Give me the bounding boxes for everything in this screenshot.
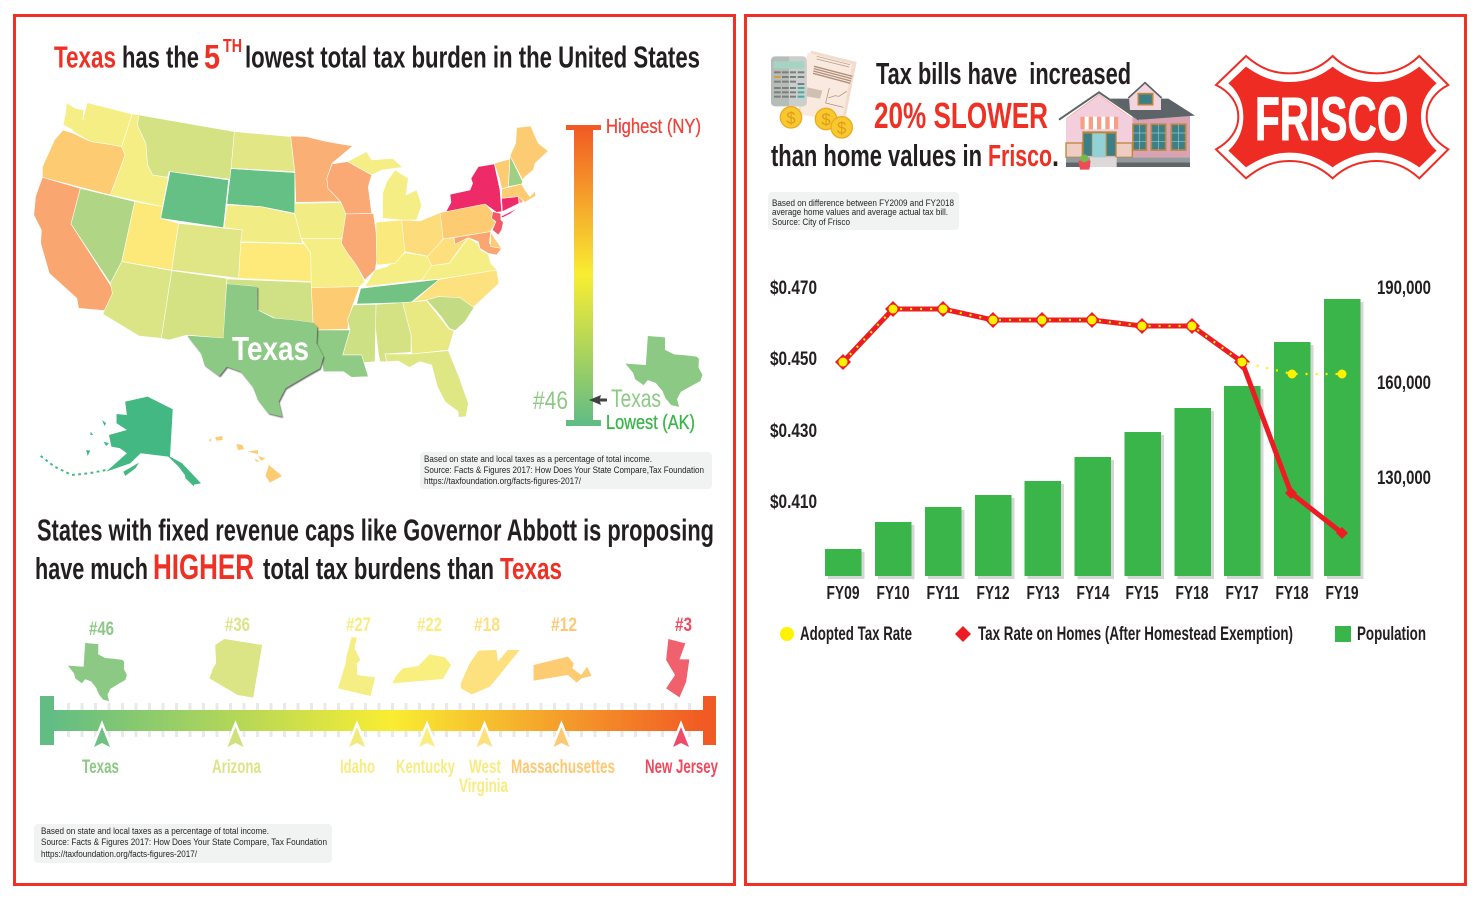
logo: Frisco — [1216, 56, 1448, 178]
right axis labels — [1377, 278, 1431, 489]
x axis labels: FY14 — [1076, 582, 1110, 603]
map: United States by tax burden — [34, 103, 548, 487]
source note: Frisco: Based on difference between FY2009 and FY2018 — [772, 198, 954, 208]
item: Idaho #27 — [338, 615, 375, 778]
source note: timeline: Source: Facts & Figures 2017: How Does Your State Compare, Tax Foundation — [41, 837, 327, 847]
item: Massachusetts #12 — [511, 615, 615, 778]
item: Texas #46: #46 — [89, 619, 114, 640]
item: Texas #46: Texas — [82, 757, 119, 778]
item: West Virginia #18: West — [469, 757, 501, 778]
legend: population — [1335, 624, 1426, 645]
heading: revenue caps comparison: HIGHER — [153, 548, 254, 587]
map state: Alaska — [41, 397, 201, 487]
legend label: Texas: Texas — [611, 385, 661, 413]
map label: Texas: Texas — [232, 330, 309, 367]
legend label: lowest: Lowest (AK) — [606, 412, 695, 434]
headline: tax bills vs home values: Tax bills have increased — [876, 56, 1131, 91]
item: Massachusetts #12: Massachusettes — [511, 757, 615, 778]
line: tax rate on homes — [835, 301, 1348, 539]
icon: calculator, bill and coins: $ — [786, 108, 796, 127]
panel: Texas tax burden — [14, 16, 734, 884]
panel: Frisco tax bills — [746, 16, 1466, 884]
title: Texas has the 5th lowest total tax burden: has the — [122, 40, 199, 74]
line: adopted tax rate — [838, 304, 1346, 378]
panel border right — [746, 16, 1466, 884]
source note: Frisco — [768, 192, 959, 230]
left axis labels: $0.450 — [770, 349, 817, 370]
x axis labels: FY11 — [926, 582, 960, 603]
headline: tax bills vs home values — [771, 56, 1131, 173]
right axis labels: 130,000 — [1377, 468, 1431, 489]
heading: revenue caps comparison: have much — [35, 551, 148, 586]
item: Kentucky #22 — [392, 615, 455, 778]
x axis labels: FY17 — [1226, 582, 1258, 603]
title: Texas has the 5th lowest total tax burden: lowest total tax burden in the United States — [245, 40, 700, 74]
heading: revenue caps comparison: total tax burdens than — [263, 551, 494, 586]
legend: adopted tax rate: Adopted Tax Rate — [800, 624, 912, 645]
legend: tax rate on homes: Tax Rate on Homes (After Homestead Exemption) — [978, 624, 1293, 645]
icon: calculator, bill and coins — [771, 51, 857, 138]
legend label: #46: #46 — [533, 387, 568, 415]
headline: tax bills vs home values: than home values in — [771, 138, 982, 173]
source note: timeline: https://taxfoundation.org/facts-figures-2017/ — [41, 849, 197, 859]
source note: map: Based on state and local taxes as a percentage of total income. — [424, 454, 652, 464]
item: New Jersey #3: New Jersey — [645, 757, 718, 778]
heading: revenue caps comparison: Texas — [500, 551, 562, 586]
legend: adopted tax rate — [780, 624, 912, 645]
icon: house — [1059, 83, 1195, 170]
source note: Frisco: Source: City of Frisco — [772, 217, 850, 227]
item: Kentucky #22: Kentucky — [396, 757, 455, 778]
title: Texas has the 5th lowest total tax burden: Texas — [54, 40, 116, 74]
left axis labels: $0.410 — [770, 492, 817, 513]
item: New Jersey #3 — [645, 615, 718, 778]
chart: population bars and tax rate lines — [770, 278, 1431, 603]
item: Texas #46 — [68, 619, 127, 778]
item: West Virginia #18 — [459, 615, 520, 797]
legend: vertical scale — [533, 116, 702, 434]
heading: revenue caps comparison: States with fixed revenue caps like Governor Abbott is proposing — [37, 512, 714, 548]
source note: timeline: Based on state and local taxes as a percentage of total income. — [41, 826, 269, 836]
legend: tax rate on homes — [955, 624, 1293, 645]
x axis labels: FY19 — [1326, 582, 1358, 603]
x axis labels: FY18 — [1276, 582, 1308, 603]
title: Texas has the 5th lowest total tax burden: 5 — [204, 38, 220, 76]
timeline gradient bar — [40, 696, 716, 745]
left axis labels: $0.470 — [770, 278, 817, 299]
item: New Jersey #3: #3 — [675, 615, 692, 636]
logo: Frisco: FRISCO — [1255, 85, 1408, 153]
x axis labels: FY13 — [1026, 582, 1060, 603]
timeline markers — [94, 727, 689, 747]
chart legend — [780, 624, 1426, 645]
item: West Virginia #18: Virginia — [459, 776, 508, 797]
headline: tax bills vs home values: Frisco — [988, 138, 1052, 173]
arrow pointing at scale — [589, 395, 607, 405]
icon: Texas shape — [625, 336, 702, 407]
source note: map: https://taxfoundation.org/facts-figures-2017/ — [424, 476, 581, 486]
x axis labels: FY18 — [1176, 582, 1208, 603]
item: Idaho #27: Idaho — [340, 757, 375, 778]
legend: population: Population — [1357, 624, 1426, 645]
x axis labels — [826, 582, 1358, 603]
headline: tax bills vs home values: 20% SLOWER — [874, 95, 1048, 136]
x axis labels: FY12 — [976, 582, 1010, 603]
item: Kentucky #22: #22 — [417, 615, 442, 636]
heading: revenue caps comparison — [35, 512, 714, 587]
map state: Hawaii — [209, 436, 282, 483]
panel border left — [14, 16, 734, 884]
icon: calculator, bill and coins: $ — [821, 110, 831, 129]
source note: Frisco: average home values and average actual tax bill. — [772, 207, 948, 217]
item: Arizona #36: Arizona — [212, 757, 261, 778]
item: Idaho #27: #27 — [346, 615, 371, 636]
left axis labels: $0.430 — [770, 421, 817, 442]
map state: Texas highlighted — [187, 284, 323, 417]
right axis labels: 160,000 — [1377, 373, 1431, 394]
item: Arizona #36: #36 — [225, 615, 250, 636]
left axis labels — [770, 278, 817, 513]
source note: timeline — [34, 824, 332, 863]
chart: timeline of state ranks — [40, 696, 716, 747]
source note: map — [420, 452, 712, 489]
x axis labels: FY15 — [1126, 582, 1158, 603]
x axis labels: FY10 — [876, 582, 910, 603]
right axis labels: 190,000 — [1377, 278, 1431, 299]
timeline ticks — [67, 703, 691, 737]
item: Massachusetts #12: #12 — [551, 615, 577, 636]
title: Texas has the 5th lowest total tax burden — [54, 36, 700, 76]
legend label: highest: Highest (NY) — [606, 116, 701, 138]
population bars — [825, 299, 1364, 579]
x axis labels: FY09 — [826, 582, 860, 603]
source note: map: Source: Facts & Figures 2017: How Does Your State Compare,Tax Foundation — [424, 465, 704, 475]
headline: tax bills vs home values: . — [1052, 138, 1059, 173]
icon: calculator, bill and coins: $ — [837, 118, 846, 137]
title: Texas has the 5th lowest total tax burden: TH — [223, 36, 242, 56]
item: Arizona #36 — [209, 615, 262, 778]
item: West Virginia #18: #18 — [474, 615, 500, 636]
